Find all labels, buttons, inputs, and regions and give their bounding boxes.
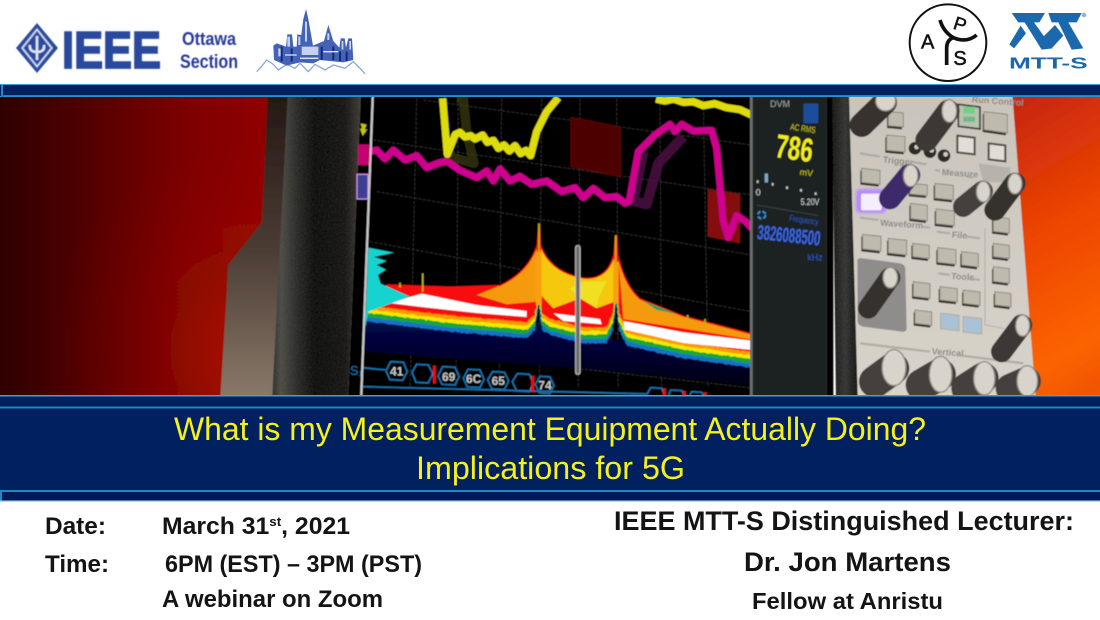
section labels: Tools xyxy=(951,271,975,283)
logo text: Ottawa Section xyxy=(180,29,238,73)
decode labels: 69 xyxy=(442,370,456,384)
waveform display xyxy=(350,98,755,397)
decode labels: 41 xyxy=(390,365,404,379)
frequency unit: kHz xyxy=(807,253,823,263)
vertical cursor xyxy=(576,246,580,374)
photo: oscilloscope on red and orange background xyxy=(0,88,1100,405)
logo: Ottawa parliament illustration xyxy=(257,9,365,74)
decode labels: 74 xyxy=(538,379,552,393)
run stop button xyxy=(958,104,980,129)
hold area xyxy=(978,163,1012,182)
section labels xyxy=(880,94,1024,359)
yellow trace xyxy=(443,98,558,156)
webinar note: A webinar on Zoom xyxy=(162,586,383,613)
magenta trace xyxy=(370,124,753,238)
scope housing edge xyxy=(220,97,288,395)
logo: IEEE xyxy=(16,22,161,80)
logo text: Ottawa Section: Section xyxy=(180,52,238,73)
scale ticks xyxy=(757,173,817,195)
lines between sections xyxy=(860,153,1023,363)
logo: AP-S circle: A xyxy=(921,31,935,53)
DVM label: DVM xyxy=(770,99,790,109)
icon: IEEE diamond xyxy=(16,23,58,73)
event details xyxy=(45,513,422,613)
white hot bands xyxy=(389,294,755,350)
outlined setup buttons xyxy=(957,136,1005,161)
logo text: Ottawa Section: Ottawa xyxy=(182,29,237,49)
section labels: Vertical xyxy=(932,346,964,359)
magenta trace ghost xyxy=(633,137,683,204)
serial decode bus xyxy=(362,362,704,397)
grid xyxy=(367,98,755,388)
spectrum density plot xyxy=(364,222,751,386)
decode labels xyxy=(389,366,553,390)
lecturer details xyxy=(614,506,1074,614)
lecturer heading: IEEE MTT-S Distinguished Lecturer: xyxy=(614,506,1074,536)
DVM and frequency side panel: 5.20V xyxy=(801,197,819,207)
red limit boxes xyxy=(571,117,620,177)
spectrum navy floor xyxy=(363,318,755,386)
background: orange right xyxy=(1005,90,1100,402)
frequency reading: 3826088500 xyxy=(756,221,822,251)
date value: st xyxy=(269,514,282,529)
unit mV: mV xyxy=(799,167,814,178)
traces xyxy=(370,98,753,238)
frequency label: Frequency xyxy=(789,213,819,227)
DVM blue button xyxy=(803,103,818,123)
logo: AP-S circle: S xyxy=(953,48,967,70)
screen bezel line xyxy=(361,90,373,402)
yellow trace ghost xyxy=(450,98,474,163)
channel label: S₁ xyxy=(350,364,363,378)
lecturer name: Dr. Jon Martens xyxy=(744,547,951,577)
panel buttons xyxy=(862,112,1011,325)
front panel controls xyxy=(856,91,1038,396)
section labels: File xyxy=(952,230,968,241)
knobs xyxy=(862,102,1027,388)
title line 2: Implications for 5G xyxy=(416,450,685,486)
channel icons xyxy=(357,123,369,199)
cyan histogram xyxy=(365,248,410,328)
scale labels: 0 xyxy=(756,188,761,198)
blue wave buttons xyxy=(941,313,982,334)
wordmark: IEEE: IEEE xyxy=(62,22,161,80)
yellow trace right xyxy=(656,99,752,115)
section labels: Measure xyxy=(942,167,979,180)
voltage reading: 786 xyxy=(773,128,815,170)
logo: MTT-S xyxy=(1009,13,1088,72)
title line 1: What is my Measurement Equipment Actually Doing? xyxy=(174,411,926,447)
spectrum colour bands xyxy=(364,222,751,368)
small round selector knobs xyxy=(909,142,950,162)
knob caps xyxy=(876,91,1038,396)
date value: , 2021 xyxy=(281,513,350,540)
AC RMS label: AC RMS xyxy=(790,122,816,135)
screen xyxy=(348,90,756,402)
logo: AP-S circle: P xyxy=(951,12,969,36)
icon: MTT-S emblem xyxy=(1009,13,1086,50)
decode labels: 65 xyxy=(492,374,505,388)
date label: Date: xyxy=(45,513,106,540)
decode labels: 6C xyxy=(466,372,482,386)
section labels: Run Control xyxy=(972,94,1024,108)
spectrum spikes xyxy=(400,223,705,325)
top band xyxy=(0,84,1100,97)
envelope edge xyxy=(387,245,755,334)
right textured pillar xyxy=(832,90,858,402)
lecturer role: Fellow at Anristu xyxy=(752,588,943,614)
section labels: Trigger xyxy=(882,154,914,168)
DVM and frequency side panel xyxy=(750,88,833,405)
time value: 6PM (EST) – 3PM (PST) xyxy=(165,551,422,578)
housing black pillar xyxy=(272,90,361,402)
lit force button xyxy=(856,189,886,213)
section labels: Waveform xyxy=(880,218,924,231)
orange and yellow peak regions xyxy=(477,248,537,304)
title band xyxy=(0,395,1100,502)
background: red left xyxy=(0,90,275,402)
control panel xyxy=(849,90,1036,402)
background: red glow xyxy=(94,156,264,395)
time label: Time: xyxy=(45,551,109,578)
date value: March 31 xyxy=(162,513,266,540)
wordmark: MTT-S: MTT-S xyxy=(1009,55,1088,72)
grey navigation block xyxy=(857,258,907,332)
button shadows xyxy=(860,114,1010,328)
logo: AP-S circle xyxy=(910,4,986,81)
